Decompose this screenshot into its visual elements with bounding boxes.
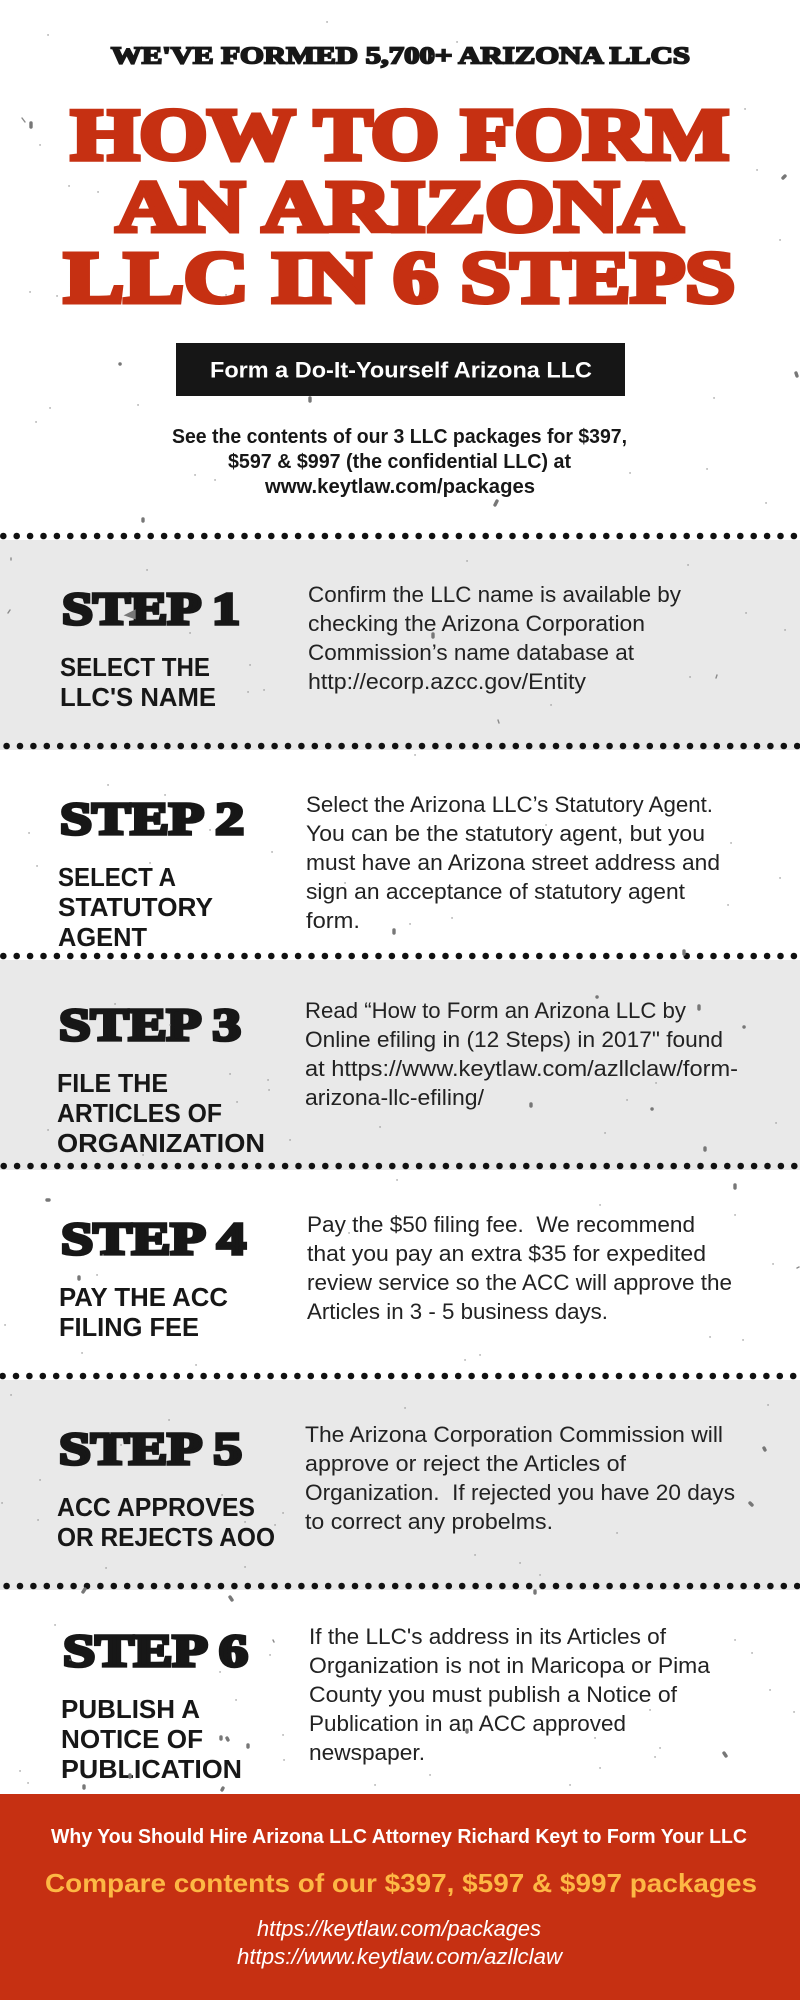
panel: step 2	[58, 792, 720, 952]
panel: step 6	[61, 1624, 711, 1784]
button: do-it-yourself: Form a Do-It-Yourself Arizona LLC	[210, 358, 592, 382]
step 6 subtitle: PUBLISH A	[61, 1696, 200, 1724]
step 1 description: Commission’s name database at	[308, 640, 634, 665]
packages text block: $597 & $997 (the confidential LLC) at	[228, 451, 571, 473]
step 5 description: The Arizona Corporation Commission will	[305, 1422, 723, 1447]
step 6 description: Organization is not in Maricopa or Pima	[309, 1653, 711, 1678]
step 5 description: approve or reject the Articles of	[305, 1451, 627, 1476]
step 4 description: Pay the $50 filing fee. We recommend	[307, 1212, 695, 1237]
step 3 subtitle	[57, 1070, 265, 1158]
step 6 description: newspaper.	[309, 1740, 425, 1765]
step 3 subtitle: FILE THE	[57, 1070, 168, 1098]
step 4 heading: STEP 4	[61, 1213, 246, 1264]
step 1 heading: STEP 1	[62, 583, 240, 634]
step 3 subtitle: ARTICLES OF	[57, 1100, 222, 1128]
footer callout: Compare contents of our $397, $597 & $997 packages	[45, 1870, 757, 1898]
step 5 subtitle	[57, 1494, 275, 1552]
step 6 heading: STEP 6	[63, 1625, 248, 1676]
packages text block: See the contents of our 3 LLC packages for $397,	[172, 426, 627, 448]
step 4 description: review service so the ACC will approve the	[307, 1270, 732, 1295]
step 4 description: that you pay an extra $35 for expedited	[307, 1241, 706, 1266]
packages text block: www.keytlaw.com/packages	[264, 476, 535, 498]
step 2 description: Select the Arizona LLC’s Statutory Agent.	[306, 792, 713, 817]
panel: step 4	[59, 1212, 732, 1342]
panel: step 3	[57, 998, 738, 1158]
step 5 subtitle: ACC APPROVES	[57, 1494, 255, 1522]
step 2 subtitle: AGENT	[58, 924, 147, 952]
step 6 subtitle: PUBLICATION	[61, 1756, 242, 1784]
step 6 subtitle	[61, 1696, 242, 1784]
step 2 subtitle: SELECT A	[58, 864, 176, 892]
step 3 description: Read “How to Form an Arizona LLC by	[305, 998, 686, 1023]
step 2 description: You can be the statutory agent, but you	[306, 821, 705, 846]
step 4 subtitle: FILING FEE	[59, 1314, 199, 1342]
eyebrow heading: WE'VE FORMED 5,700+ ARIZONA LLCS	[111, 44, 690, 70]
step 2 subtitle: STATUTORY	[58, 894, 213, 922]
footer heading: Why You Should Hire Arizona LLC Attorney Richard Keyt to Form Your LLC	[51, 1826, 747, 1848]
step 3 heading: STEP 3	[59, 999, 241, 1050]
step 3 description	[305, 998, 738, 1110]
footer links	[237, 1916, 564, 1969]
step 5 heading: STEP 5	[59, 1423, 242, 1474]
step 6 description: County you must publish a Notice of	[309, 1682, 678, 1707]
step 5 description: Organization. If rejected you have 20 days	[305, 1480, 735, 1505]
step 2 subtitle	[58, 864, 213, 952]
panel: step 5	[57, 1422, 735, 1552]
step 6 description: If the LLC's address in its Articles of	[309, 1624, 667, 1649]
step 6 description: Publication in an ACC approved	[309, 1711, 626, 1736]
step 4 subtitle	[59, 1284, 228, 1342]
step 4 subtitle: PAY THE ACC	[59, 1284, 228, 1312]
step 1 subtitle	[60, 654, 216, 712]
step 3 description: Online efiling in (12 Steps) in 2017" found	[305, 1027, 723, 1052]
step 5 description	[305, 1422, 735, 1534]
title	[64, 94, 735, 318]
step 1 description	[308, 582, 681, 694]
step 2 description: must have an Arizona street address and	[306, 850, 720, 875]
footer links: https://keytlaw.com/packages	[257, 1916, 541, 1941]
step 2 description: sign an acceptance of statutory agent	[306, 879, 685, 904]
step 1 description: Confirm the LLC name is available by	[308, 582, 681, 607]
footer links: https://www.keytlaw.com/azllclaw	[237, 1944, 564, 1969]
step 5 description: to correct any probelms.	[305, 1509, 553, 1534]
button: do-it-yourself	[176, 343, 625, 396]
step 6 subtitle: NOTICE OF	[61, 1726, 203, 1754]
step 2 description: form.	[306, 908, 360, 933]
step 4 description: Articles in 3 - 5 business days.	[307, 1299, 608, 1324]
step 3 description: at https://www.keytlaw.com/azllclaw/form-	[305, 1056, 738, 1081]
step 4 description	[307, 1212, 732, 1324]
step 3 subtitle: ORGANIZATION	[57, 1130, 265, 1158]
title: AN ARIZONA	[116, 166, 683, 247]
packages text block	[172, 426, 627, 498]
title: HOW TO FORM	[71, 94, 729, 175]
step 1 description: http://ecorp.azcc.gov/Entity	[308, 669, 586, 694]
step 1 subtitle: SELECT THE	[60, 654, 210, 682]
step 1 description: checking the Arizona Corporation	[308, 611, 645, 636]
title: LLC IN 6 STEPS	[64, 237, 735, 318]
footer panel	[0, 1794, 800, 2000]
panel: step 1	[60, 582, 681, 712]
step 6 description	[309, 1624, 711, 1765]
step 1 subtitle: LLC'S NAME	[60, 684, 216, 712]
step 5 subtitle: OR REJECTS AOO	[57, 1524, 275, 1552]
step 3 description: arizona-llc-efiling/	[305, 1085, 485, 1110]
step 2 description	[306, 792, 720, 933]
step 2 heading: STEP 2	[60, 793, 244, 844]
